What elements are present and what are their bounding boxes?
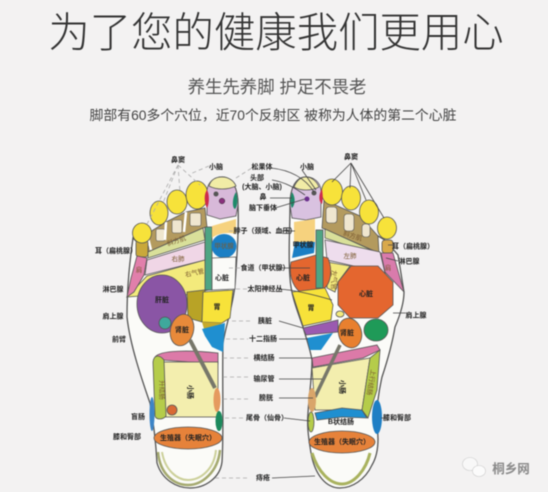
right foot diagram bbox=[289, 177, 404, 488]
anatomical callout labels: 横结肠 bbox=[254, 353, 274, 362]
left heel zones bbox=[154, 427, 222, 485]
anatomical callout labels: 前臂 bbox=[112, 334, 126, 344]
anatomical callout labels: 耳（扁桃腺） bbox=[392, 242, 434, 250]
right intestine zones bbox=[308, 345, 382, 434]
anatomical callout labels: 脖子（颈域、血压） bbox=[234, 226, 296, 235]
anatomical callout labels: 输尿管 bbox=[254, 374, 274, 383]
left foot diagram bbox=[127, 177, 238, 488]
left foot inner labels: 小肠 bbox=[186, 385, 195, 399]
anatomical callout labels: 痔疮 bbox=[256, 473, 270, 482]
anatomical callout labels: 松果体 bbox=[252, 162, 272, 171]
description line: 脚部有60多个穴位，近70个反射区 被称为人体的第二个心脏 bbox=[90, 107, 457, 123]
left foot inner labels bbox=[136, 233, 234, 442]
anatomical callout labels: 太阳神经丛 bbox=[248, 284, 282, 293]
anatomical callout labels: 尾骨（仙骨） bbox=[246, 413, 288, 422]
subtitle: 养生先养脚 护足不畏老 bbox=[188, 77, 366, 97]
anatomical callout labels: 肩上腺 bbox=[102, 312, 124, 320]
anatomical callout labels: 鼻窦 bbox=[171, 155, 185, 164]
right foot inner labels: 心脏 bbox=[359, 289, 373, 298]
icon: chat bubbles bbox=[462, 458, 486, 476]
left foot inner labels: 右肺 bbox=[172, 254, 185, 263]
right plantar zones bbox=[290, 219, 404, 350]
right foot inner labels: 肩 bbox=[385, 263, 391, 272]
anatomical callout labels: 盲肠 bbox=[131, 412, 145, 421]
left foot inner labels: 肝脏 bbox=[155, 295, 169, 304]
left intestine zones bbox=[150, 340, 222, 431]
anatomical callout labels: 头部 bbox=[250, 173, 264, 182]
right toes bbox=[322, 179, 396, 253]
left plantar zones bbox=[127, 219, 236, 352]
left foot inner labels: 生殖器（失眠穴） bbox=[160, 433, 216, 442]
left foot inner labels: 胃 bbox=[214, 303, 220, 311]
right foot inner labels: 小肠 bbox=[338, 380, 347, 394]
anatomical callout labels: 脑下垂体 bbox=[249, 203, 277, 212]
title: 为了您的健康我们更用心 bbox=[48, 10, 504, 56]
anatomical callout labels: 小脑 bbox=[209, 162, 223, 171]
anatomical callout labels: 淋巴腺 bbox=[102, 284, 124, 294]
left foot inner labels: 右气管 bbox=[184, 266, 205, 279]
right foot inner labels: 肾脏 bbox=[340, 328, 354, 337]
right foot inner labels: B状结肠 bbox=[328, 417, 354, 426]
connector lines bbox=[146, 163, 406, 478]
right heel zones bbox=[309, 431, 375, 484]
right foot outline bbox=[289, 177, 404, 488]
anatomical callout labels: 食道（甲状腺） bbox=[240, 263, 290, 272]
anatomical callout labels: (大脑、小脑) bbox=[242, 182, 282, 191]
anatomical callout labels: 膝和臀部 bbox=[113, 432, 141, 441]
anatomical callout labels: 肩上腺 bbox=[406, 310, 426, 320]
right foot inner labels: 左气管 bbox=[330, 270, 339, 290]
right foot inner labels: 胃 bbox=[308, 304, 314, 312]
right foot inner labels: 上行结肠 bbox=[365, 369, 378, 397]
right foot inner labels: 甲状腺 bbox=[292, 240, 314, 249]
anatomical callout labels: 耳（扁桃腺） bbox=[95, 246, 137, 255]
right foot inner labels: 生殖器（失眠穴） bbox=[314, 437, 370, 446]
anatomical callout labels: 小脑 bbox=[300, 162, 314, 171]
right big toe zones bbox=[290, 177, 323, 220]
right foot inner labels bbox=[292, 228, 391, 446]
anatomical callout labels: 胰脏 bbox=[258, 316, 272, 325]
anatomical callout labels: 鼻窦 bbox=[344, 152, 358, 161]
right foot inner labels: 心脏 bbox=[296, 273, 310, 282]
left foot inner labels: 甲状腺 bbox=[214, 241, 234, 250]
left foot inner labels: 升结肠 bbox=[158, 380, 167, 400]
watermark bbox=[462, 458, 530, 476]
anatomical callout labels: 十二指肠 bbox=[249, 334, 277, 343]
anatomical callout labels: 膀胱 bbox=[259, 393, 273, 402]
right foot inner labels: 斜方肌 bbox=[342, 228, 364, 243]
anatomical callout labels: 膝和臀部 bbox=[383, 413, 411, 422]
left foot inner labels: 心脏 bbox=[215, 273, 229, 282]
right foot inner labels: 左肺 bbox=[344, 251, 357, 260]
watermark text: 桐乡网 bbox=[492, 461, 530, 476]
left big toe zones bbox=[205, 177, 238, 219]
left toes bbox=[132, 181, 208, 257]
left foot inner labels: 肾脏 bbox=[175, 325, 189, 334]
anatomical callout labels bbox=[95, 152, 434, 482]
left foot inner labels: 斜方肌 bbox=[166, 233, 187, 248]
left foot inner labels: 肩 bbox=[136, 265, 142, 274]
anatomical callout labels: 淋巴腺 bbox=[398, 256, 420, 266]
left foot outline bbox=[127, 177, 238, 488]
anatomical callout labels: 鼻 bbox=[260, 192, 266, 201]
